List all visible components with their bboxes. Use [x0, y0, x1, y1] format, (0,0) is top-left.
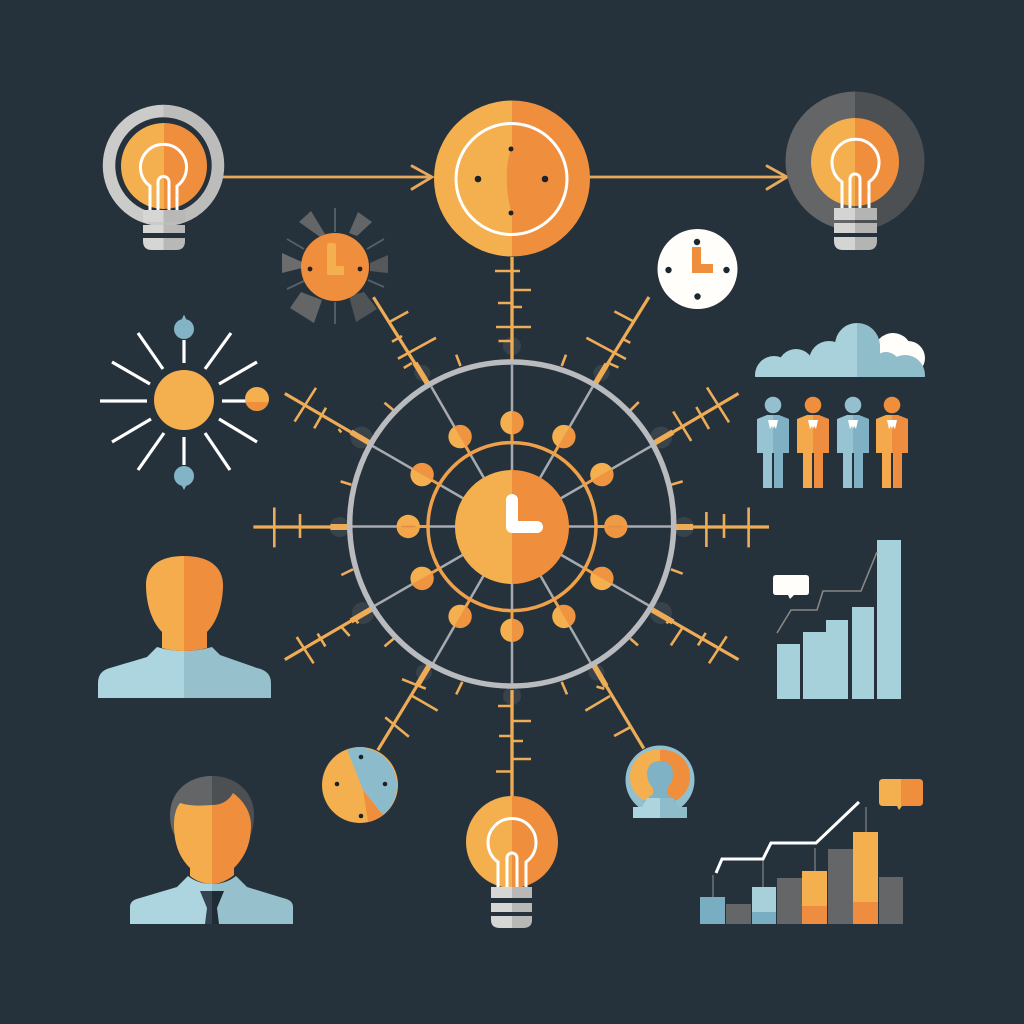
spoke: top [495, 257, 531, 362]
icon: central top orange circle [434, 100, 590, 256]
spoke: upper right steep [586, 297, 649, 384]
icon: bust with hair and tie [130, 776, 293, 924]
person: orange [876, 397, 908, 488]
spoke: left [253, 508, 348, 547]
icon: row of four people [757, 397, 908, 488]
icon: small orange sun with wedges [282, 208, 388, 324]
icon: left sun with white rays [100, 314, 269, 490]
spoke: lower right shallow [652, 610, 738, 663]
person: blue [757, 397, 789, 488]
icon: left light bulb with grey ring [109, 105, 224, 250]
spoke: lower right steep [585, 666, 644, 748]
central clock hub [455, 470, 569, 584]
spoke: bottom [496, 690, 531, 797]
chart: multi-colour bars with white trend line [700, 779, 923, 924]
spoke: upper left steep [373, 297, 436, 383]
spoke: upper left shallow [285, 388, 372, 444]
chart: light blue bars with line and bubble [773, 540, 901, 699]
spoke: lower left shallow [285, 609, 372, 663]
spoke: right [675, 508, 769, 547]
icon: white clock [658, 229, 738, 309]
icon: right light bulb with dark disc [786, 92, 924, 250]
inner grey spokes [350, 365, 674, 688]
person: blue [837, 397, 869, 488]
person: orange [797, 397, 829, 488]
icon: bottom light bulb [466, 796, 558, 928]
orbit nodes [396, 411, 628, 642]
arrow: central circle to right bulb [588, 166, 787, 189]
icon: person in circular badge [626, 746, 694, 818]
arrow: left bulb to central circle [222, 166, 432, 189]
icon: bust with plain head [98, 556, 271, 698]
icon: cloud [750, 323, 930, 397]
spoke: upper right shallow [652, 387, 738, 444]
icon: pie circle [322, 747, 398, 823]
spoke: lower left steep [378, 666, 438, 750]
outer spokes with tick marks [253, 257, 769, 797]
radial hub diagram [253, 257, 769, 797]
inner orange ring [428, 443, 596, 611]
outer grey ring [350, 362, 674, 686]
grey smudges behind spoke roots [330, 337, 694, 705]
short ticks outside the ring [341, 355, 683, 694]
